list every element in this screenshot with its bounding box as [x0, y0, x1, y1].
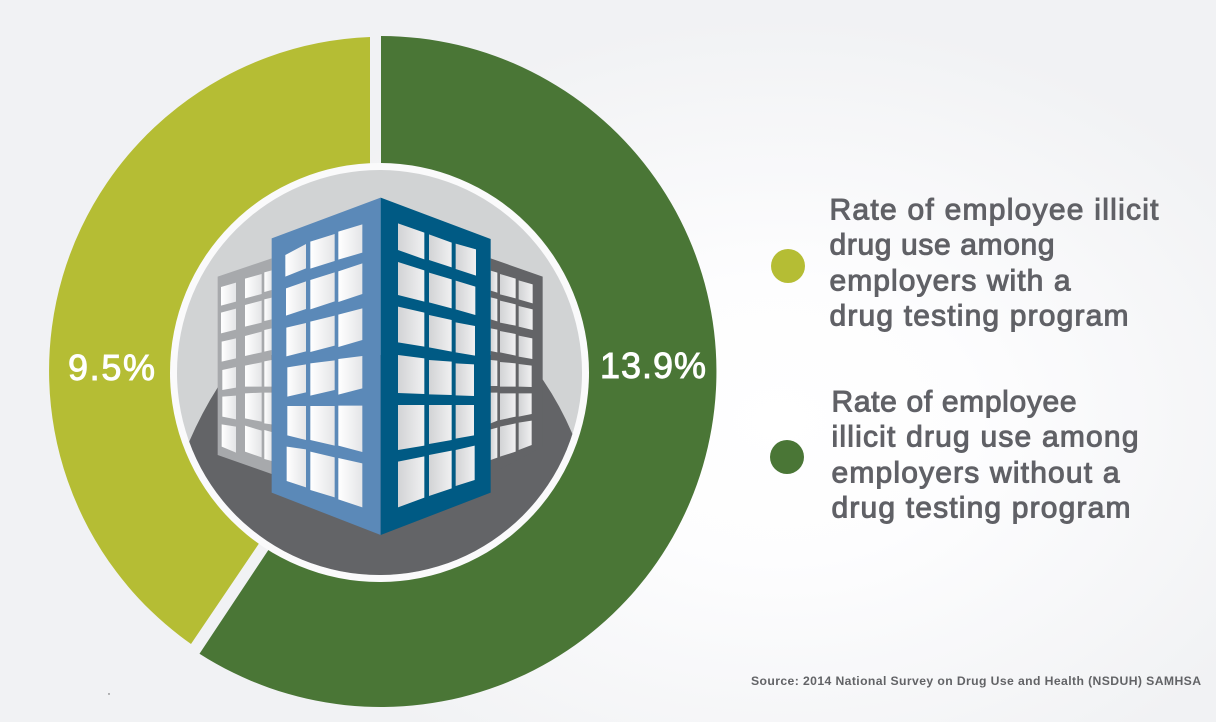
legend text: without program: drug testing program	[832, 492, 1130, 524]
legend text: without program: employers without a	[832, 456, 1120, 490]
legend item: with testing program	[771, 194, 1159, 332]
ground	[189, 355, 572, 575]
back building left	[218, 258, 272, 474]
legend text: with program: drug testing program	[830, 300, 1128, 332]
value: 13.9%: 13.9%	[600, 345, 706, 386]
source note: Source: 2014 National Survey on Drug Use and Health (NSDUH) SAMHSA	[751, 674, 1201, 688]
front building right face	[381, 198, 491, 535]
segment: without testing program 13.9%	[200, 36, 716, 707]
value: 9.5%: 9.5%	[68, 347, 155, 388]
segment: with testing program 9.5%	[49, 37, 370, 644]
legend text: with program: Rate of employee illicit	[830, 194, 1159, 226]
legend text: with program: employers with a	[830, 264, 1071, 298]
icon: office building in circle	[170, 163, 589, 590]
back building right	[491, 258, 543, 474]
legend dot: olive	[771, 249, 805, 283]
legend text: without program	[832, 386, 1138, 524]
legend text: with program: drug use among	[830, 228, 1054, 262]
donut chart	[49, 36, 716, 707]
front building left face	[272, 198, 381, 535]
legend text: without program: illicit drug use among	[832, 420, 1138, 454]
legend dot: green	[770, 440, 804, 474]
legend item: without testing program	[770, 386, 1138, 524]
legend text: without program: Rate of employee	[832, 386, 1076, 418]
legend text: with program	[830, 194, 1159, 332]
